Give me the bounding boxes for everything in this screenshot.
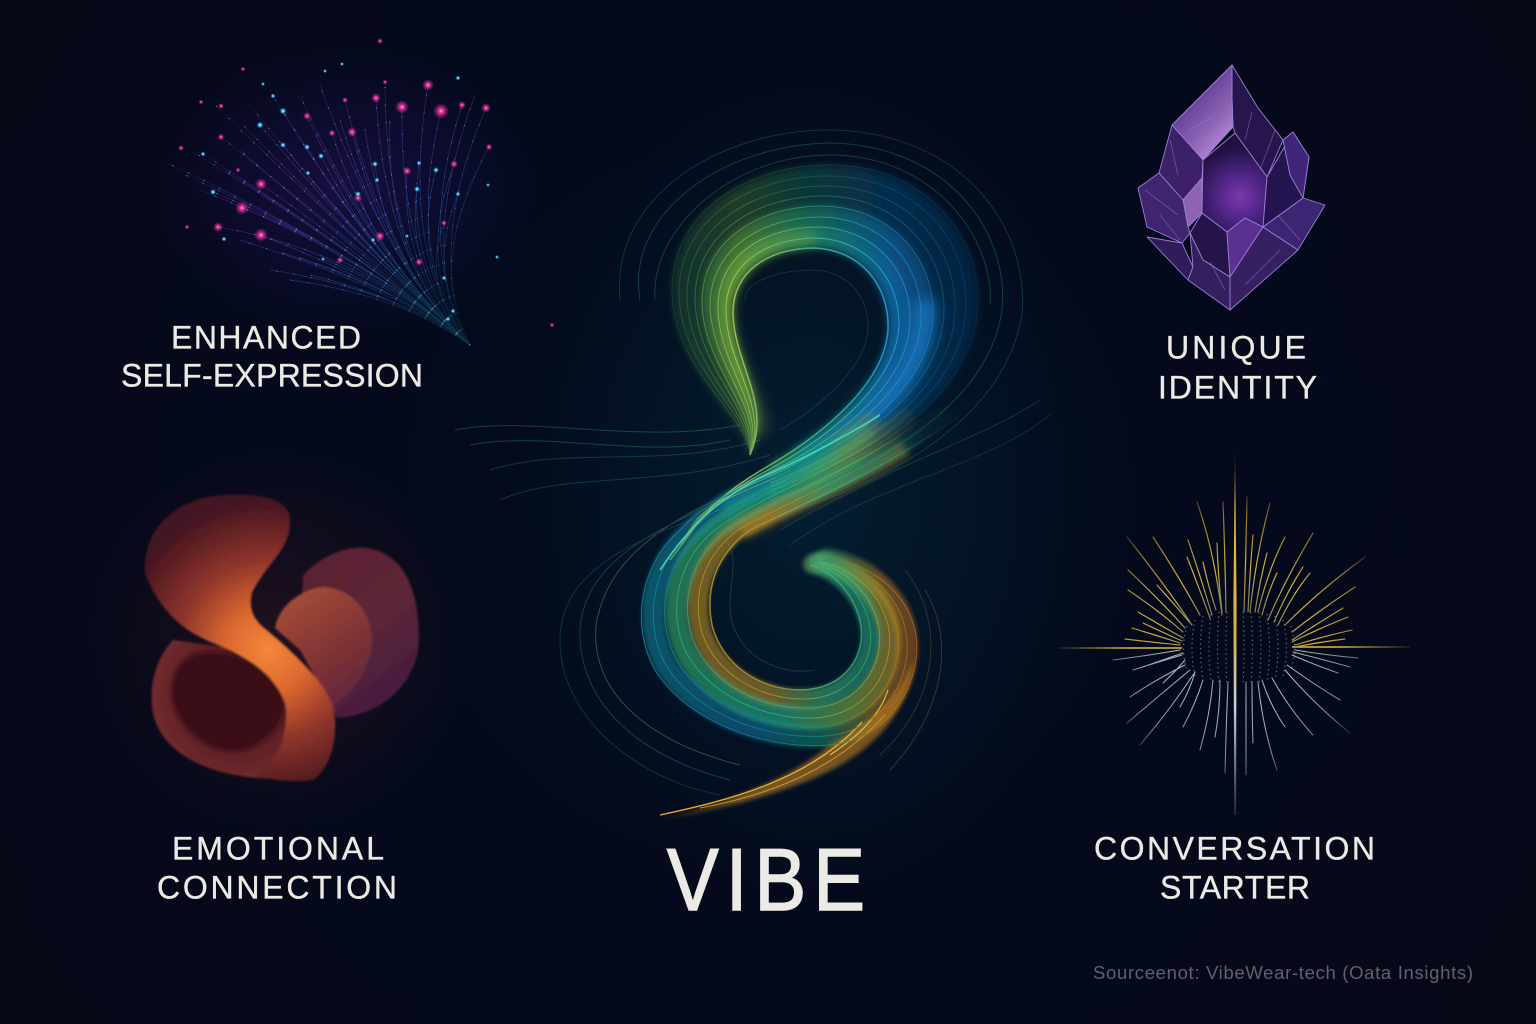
faint outer swirls (455, 130, 1050, 795)
heading: enhanced self-expression (121, 320, 423, 394)
heading: VIBE: VIBE (667, 830, 865, 929)
bright waist highlight (660, 415, 880, 570)
icon: orange ribbon for emotional connection (90, 450, 470, 830)
lower loop bands (653, 417, 941, 736)
heading: emotional connection: CONNECTION (157, 870, 397, 906)
icon: particle fan for self-expression (155, 38, 554, 345)
heading: conversation starter: STARTER (1160, 870, 1310, 906)
heading: conversation starter (1094, 830, 1375, 906)
heading: enhanced self-expression: ENHANCED (171, 320, 361, 356)
lower strands (641, 415, 960, 746)
heading: unique identity: UNIQUE (1166, 330, 1306, 366)
heading: conversation starter: CONVERSATION (1094, 830, 1375, 866)
gold upper rays (1125, 497, 1365, 647)
heading: unique identity: IDENTITY (1158, 370, 1317, 406)
waist body (722, 428, 905, 532)
icon: starburst for conversation starter (1058, 450, 1410, 815)
upper loop band (672, 165, 978, 495)
heading: unique identity (1158, 330, 1317, 406)
source footnote: Sourceenot: VibeWear-tech (Oata Insights) (1093, 962, 1473, 983)
tail (650, 660, 914, 822)
dotted core (1184, 612, 1294, 684)
heading: emotional connection: EMOTIONAL (172, 830, 384, 866)
heading: enhanced self-expression: SELF-EXPRESSION (121, 358, 423, 394)
icon: purple crystal for unique identity (1138, 65, 1325, 310)
upper strands (670, 165, 978, 560)
upper highlight glows (726, 238, 817, 435)
icon: central flowing figure-eight ribbon (455, 130, 1050, 818)
heading: emotional connection (157, 830, 397, 906)
silver lower rays (1113, 650, 1358, 775)
